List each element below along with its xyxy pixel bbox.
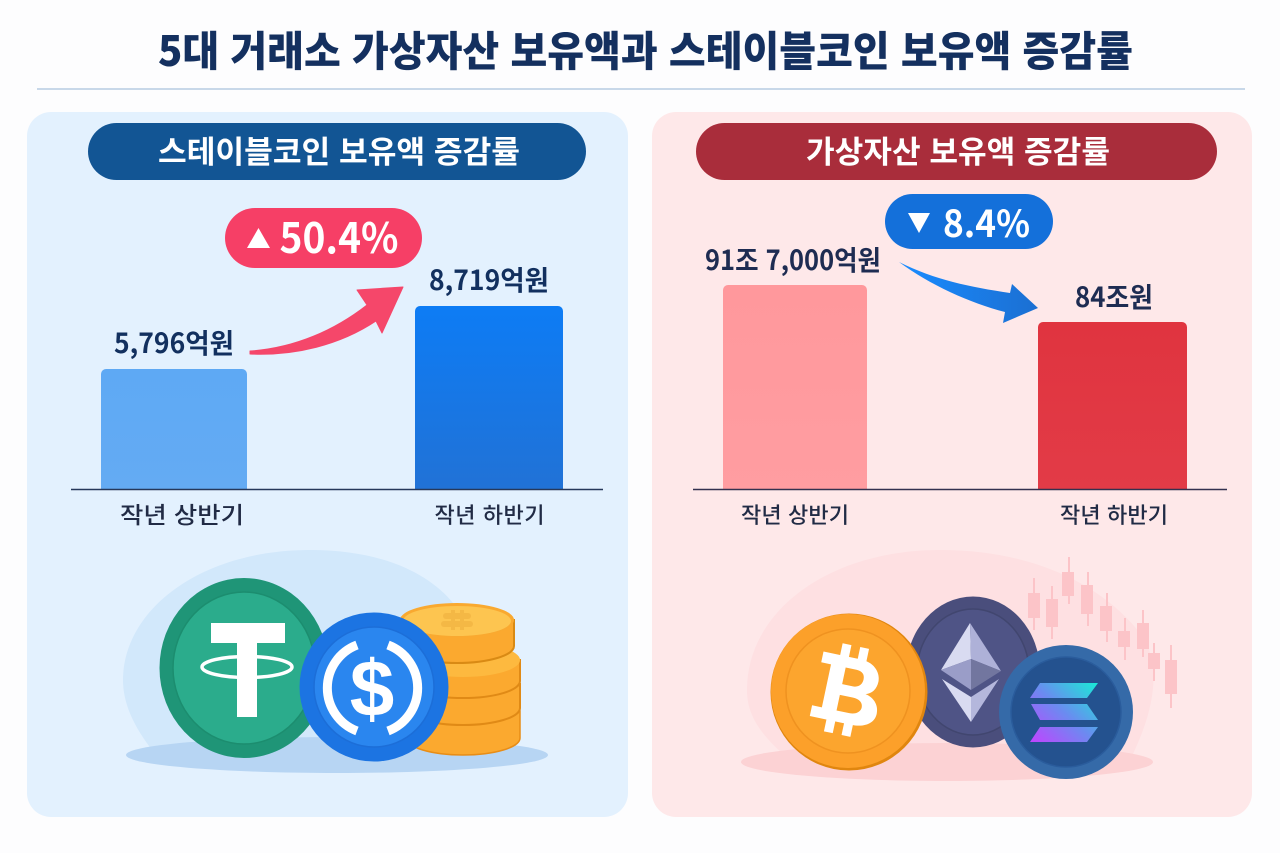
icon: tether coin <box>160 578 328 758</box>
illustration: crypto coins <box>741 550 1177 781</box>
callout: down 8.4% <box>885 194 1053 249</box>
axis label: second half: 작년 하반기 <box>1060 498 1168 530</box>
bar: first half stablecoin <box>101 369 247 489</box>
icon: solana coin <box>999 645 1133 779</box>
icon: bitcoin coin <box>770 614 928 770</box>
panel heading: crypto assets: 가상자산 보유액 증감률 <box>806 127 1110 172</box>
panel: crypto asset holdings <box>652 112 1252 817</box>
callout: up 50.4% <box>225 205 422 268</box>
value: first half crypto: 91조 7,000억원 <box>705 238 881 278</box>
value: second half crypto: 84조원 <box>1075 275 1153 315</box>
icon: usdc coin: $ <box>350 644 394 733</box>
callout: down 8.4%: 8.4% <box>943 194 1030 248</box>
title: 5대 거래소 가상자산 보유액과 스테이블코인 보유액 증감률 <box>158 18 1133 78</box>
icon: candlestick chart <box>1028 557 1177 708</box>
value: second half stablecoin: 8,719억원 <box>429 258 549 298</box>
panel: stablecoin holdings <box>27 112 628 817</box>
panel heading: stablecoin <box>88 123 586 180</box>
arrow: upward <box>250 287 403 354</box>
bar: second half stablecoin <box>415 306 563 489</box>
axis label: second half: 작년 하반기 <box>434 498 544 530</box>
callout: up 50.4%: 50.4% <box>280 205 398 266</box>
illustration: stablecoins <box>123 550 548 773</box>
bar: second half crypto <box>1038 322 1187 489</box>
axis label: first half: 작년 상반기 <box>741 498 849 530</box>
panel heading: crypto assets <box>696 123 1217 180</box>
icon: usdc coin <box>300 612 448 762</box>
bar: first half crypto <box>723 285 867 489</box>
panel heading: stablecoin: 스테이블코인 보유액 증감률 <box>158 127 520 172</box>
icon: gold coin stack <box>400 603 520 755</box>
axis label: first half: 작년 상반기 <box>120 496 244 530</box>
value: first half stablecoin: 5,796억원 <box>114 321 234 361</box>
icon: ethereum coin <box>906 596 1040 748</box>
arrow: downward <box>899 262 1038 323</box>
